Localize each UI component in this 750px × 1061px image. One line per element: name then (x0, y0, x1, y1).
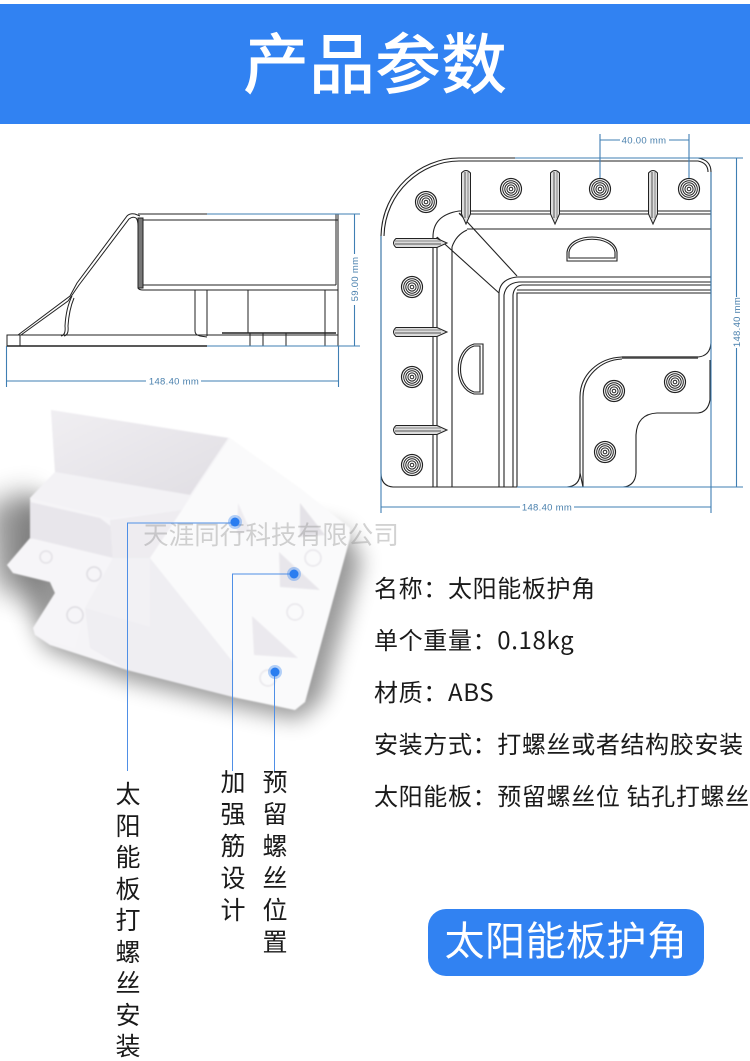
spec: material: 材质：ABS (374, 673, 494, 708)
vertical label: reserved screw positions (262, 769, 288, 957)
spec: installation: 安装方式：打螺丝或者结构胶安装 (374, 725, 744, 760)
callout leader: solar panel screw install (128, 515, 242, 771)
callout leader: reinforcing ribs (232, 567, 301, 771)
spec: weight: 单个重量：0.18kg (374, 621, 574, 656)
callout leader: reserved screw position (268, 665, 282, 771)
title: 产品参数 (243, 12, 507, 108)
watermark: 天涯同行科技有限公司 (143, 521, 399, 550)
product name button: 太阳能板护角 (444, 920, 688, 964)
product name button (428, 909, 704, 976)
vertical label: reserved screw positions: 丝 (262, 865, 288, 893)
product: solar panel corner bracket (7, 410, 350, 710)
top view dimensions: 148.40 mm (732, 297, 743, 347)
vertical label: solar panel screw install: 螺 (115, 938, 140, 966)
screw holes (402, 178, 700, 476)
side view dimensions: 148.40 mm (149, 376, 199, 388)
vertical label: reserved screw positions: 留 (262, 801, 288, 829)
vertical label: reinforcing rib design: 计 (220, 897, 246, 925)
vertical label: solar panel screw install: 板 (115, 876, 140, 904)
vertical label: reserved screw positions: 位 (262, 897, 288, 925)
vertical label: reinforcing rib design: 强 (220, 801, 246, 829)
spec: name: 名称：太阳能板护角 (374, 569, 596, 604)
vertical label: reserved screw positions: 螺 (262, 833, 288, 861)
vertical label: solar panel screw install: 打 (115, 907, 140, 935)
top view dimensions: 40.00 mm (622, 136, 666, 146)
header banner (0, 4, 750, 124)
vertical label: solar panel screw install: 太 (115, 781, 140, 809)
spec list (374, 569, 750, 812)
ribs (394, 170, 658, 434)
vertical label: reinforcing rib design: 加 (220, 769, 246, 797)
vertical label: reinforcing rib design (220, 769, 246, 925)
vertical label: solar panel screw install: 安 (115, 1002, 140, 1030)
vertical label: solar panel screw install: 丝 (115, 970, 140, 998)
vertical label: solar panel screw install (115, 781, 140, 1061)
vertical label: reinforcing rib design: 设 (220, 865, 246, 893)
vertical label: reserved screw positions: 置 (262, 929, 288, 957)
vertical label: reinforcing rib design: 筋 (220, 833, 246, 861)
vertical label: solar panel screw install: 装 (115, 1033, 140, 1061)
vertical label: solar panel screw install: 能 (115, 844, 140, 872)
vertical label: reserved screw positions: 预 (262, 769, 288, 797)
spec: solar panel: 太阳能板：预留螺丝位 钻孔打螺丝 (374, 777, 750, 812)
product: shadow (0, 490, 362, 720)
vertical label: solar panel screw install: 阳 (115, 812, 140, 840)
side view dimensions: 59.00 mm (350, 257, 361, 301)
top view dimensions: 148.40 mm (522, 502, 572, 514)
